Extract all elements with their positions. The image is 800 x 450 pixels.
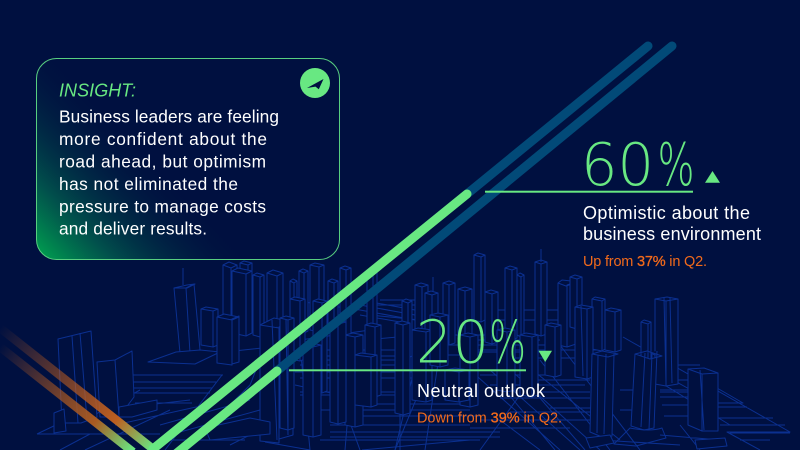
insight body text: has not eliminated the — [59, 174, 238, 194]
heading: insight: INSIGHT: — [59, 80, 136, 100]
icon: paper plane badge — [300, 68, 330, 98]
label: Optimistic about the — [583, 203, 750, 223]
insight body text: and deliver results. — [59, 219, 207, 239]
stat: 20 percent neutral — [289, 308, 562, 427]
dense centre streets — [160, 300, 700, 450]
podium blocks — [54, 409, 66, 433]
mid tower row — [174, 284, 200, 353]
label — [583, 203, 761, 244]
tower detail lines — [72, 298, 704, 440]
back tower row — [223, 262, 237, 333]
upper road line — [467, 46, 648, 194]
icon: up triangle — [705, 171, 720, 183]
wireframe city illustration — [37, 249, 790, 450]
left leg two — [0, 347, 133, 450]
left leg one — [0, 328, 153, 449]
road stripes dim section — [277, 46, 672, 371]
change note: Up from 37% in Q2. — [583, 254, 707, 270]
front towers — [260, 318, 293, 443]
big number 60%: 60 — [581, 130, 654, 199]
insight body text — [59, 107, 279, 239]
leader rule — [485, 191, 693, 193]
panel: insight card — [36, 58, 340, 260]
antenna — [183, 249, 541, 292]
bright lower line — [172, 371, 277, 450]
lower road line — [277, 46, 672, 371]
road stripes bright section — [153, 194, 467, 450]
big number 20%: 20 — [416, 308, 489, 377]
city streets — [37, 300, 790, 450]
change note: Down from 39% in Q2. — [417, 411, 562, 427]
insight body text: Business leaders are feeling — [59, 107, 279, 127]
label: business environment — [583, 224, 761, 244]
big number 60% — [581, 130, 694, 199]
bright upper line — [153, 194, 467, 449]
road stripes left fading legs — [0, 328, 153, 450]
icon: down triangle — [538, 351, 552, 362]
leader rule — [289, 369, 526, 371]
big number 60%: % — [658, 130, 694, 199]
inner city blocks — [345, 333, 363, 427]
stat: 60 percent optimistic — [485, 130, 761, 270]
insight body text: pressure to manage costs — [59, 196, 266, 216]
big number 20%: % — [489, 308, 526, 377]
insight body text: more confident about the — [59, 129, 267, 149]
insight body text: road ahead, but optimism — [59, 152, 266, 172]
big number 20% — [416, 308, 526, 377]
label: Neutral outlook — [417, 381, 546, 401]
